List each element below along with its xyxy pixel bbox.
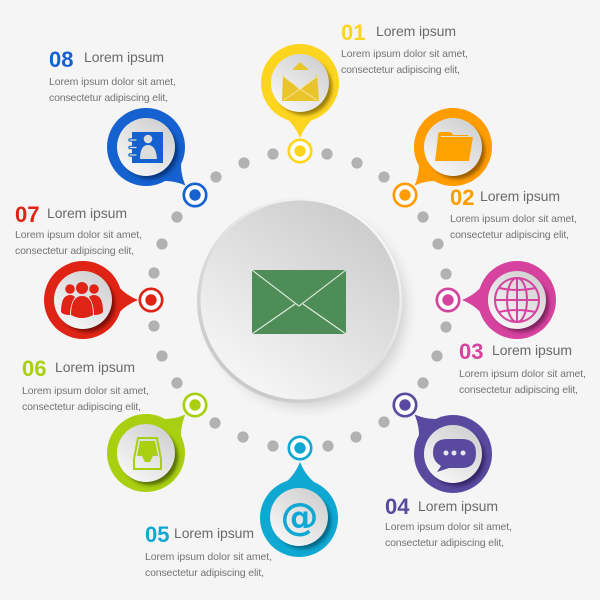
text 07: consectetur adipiscing elit, bbox=[15, 245, 134, 257]
text 07: Lorem ipsum bbox=[47, 205, 127, 221]
panel: step 02 orange bbox=[394, 108, 577, 241]
text 02: Lorem ipsum dolor sit amet, bbox=[450, 213, 577, 225]
node 01 bbox=[289, 140, 311, 162]
text 05: Lorem ipsum dolor sit amet, bbox=[145, 551, 272, 563]
icon: globe bbox=[495, 278, 539, 322]
text 03: consectetur adipiscing elit, bbox=[459, 384, 578, 396]
text 01: consectetur adipiscing elit, bbox=[341, 64, 460, 76]
node 07 bbox=[140, 289, 162, 311]
central disc bbox=[197, 198, 405, 406]
icon: group of people bbox=[61, 282, 103, 318]
icon: folder bbox=[435, 132, 473, 161]
text 06: 06 bbox=[22, 356, 46, 381]
text 04: Lorem ipsum dolor sit amet, bbox=[385, 521, 512, 533]
text 08 bbox=[49, 47, 176, 104]
text 06: Lorem ipsum dolor sit amet, bbox=[22, 385, 149, 397]
panel: step 03 magenta bbox=[437, 261, 586, 396]
pin 07 bbox=[44, 261, 138, 339]
node 04 bbox=[394, 394, 416, 416]
pin 04 bbox=[414, 414, 492, 493]
text 08: Lorem ipsum bbox=[84, 49, 164, 65]
node 08 bbox=[184, 184, 206, 206]
text 01 bbox=[341, 20, 468, 76]
text 08: consectetur adipiscing elit, bbox=[49, 92, 168, 104]
text 04: Lorem ipsum bbox=[418, 498, 498, 514]
text 05: Lorem ipsum bbox=[174, 525, 254, 541]
icon: inbox tray bbox=[134, 438, 161, 469]
text 06: consectetur adipiscing elit, bbox=[22, 401, 141, 413]
text 06: Lorem ipsum bbox=[55, 359, 135, 375]
dotted ring bbox=[148, 148, 452, 452]
panel: step 06 lime bbox=[22, 356, 206, 492]
pin 02 bbox=[414, 108, 492, 186]
pin 08 bbox=[107, 108, 186, 186]
text 04: 04 bbox=[385, 494, 410, 519]
text 03: Lorem ipsum dolor sit amet, bbox=[459, 368, 586, 380]
text 04: consectetur adipiscing elit, bbox=[385, 537, 504, 549]
text 01: Lorem ipsum bbox=[376, 23, 456, 39]
text 05: 05 bbox=[145, 522, 169, 547]
node 02 bbox=[394, 184, 416, 206]
text 08: Lorem ipsum dolor sit amet, bbox=[49, 76, 176, 88]
icon: at sign: @ bbox=[280, 495, 318, 539]
text 07: 07 bbox=[15, 202, 39, 227]
icon: closed envelope bbox=[252, 270, 346, 334]
text 02: 02 bbox=[450, 185, 474, 210]
pin 03 bbox=[462, 261, 556, 339]
pin 05 bbox=[260, 462, 338, 557]
text 03: 03 bbox=[459, 339, 483, 364]
panel: step 01 yellow bbox=[261, 20, 468, 162]
pin 01 bbox=[261, 44, 339, 138]
text 05 bbox=[145, 522, 272, 579]
text 02: Lorem ipsum bbox=[480, 188, 560, 204]
node 05 bbox=[289, 437, 311, 459]
text 02 bbox=[450, 185, 577, 241]
text 04 bbox=[385, 494, 512, 549]
text 03 bbox=[459, 339, 586, 396]
text 05: consectetur adipiscing elit, bbox=[145, 567, 264, 579]
panel: step 04 purple bbox=[385, 394, 512, 549]
icon: address book bbox=[130, 132, 163, 163]
node 03 bbox=[437, 289, 459, 311]
text 07: Lorem ipsum dolor sit amet, bbox=[15, 229, 142, 241]
text 08: 08 bbox=[49, 47, 73, 72]
text 01: 01 bbox=[341, 20, 365, 45]
icon: speech bubble bbox=[433, 439, 476, 472]
text 03: Lorem ipsum bbox=[492, 342, 572, 358]
text 02: consectetur adipiscing elit, bbox=[450, 229, 569, 241]
text 06 bbox=[22, 356, 149, 413]
node 06 bbox=[184, 394, 206, 416]
panel: step 05 cyan bbox=[145, 437, 338, 579]
panel: step 08 blue bbox=[49, 47, 206, 206]
text 01: Lorem ipsum dolor sit amet, bbox=[341, 48, 468, 60]
text 07 bbox=[15, 202, 142, 257]
icon: open envelope bbox=[282, 62, 319, 101]
panel: step 07 red bbox=[15, 202, 162, 339]
pin 06 bbox=[107, 414, 186, 492]
